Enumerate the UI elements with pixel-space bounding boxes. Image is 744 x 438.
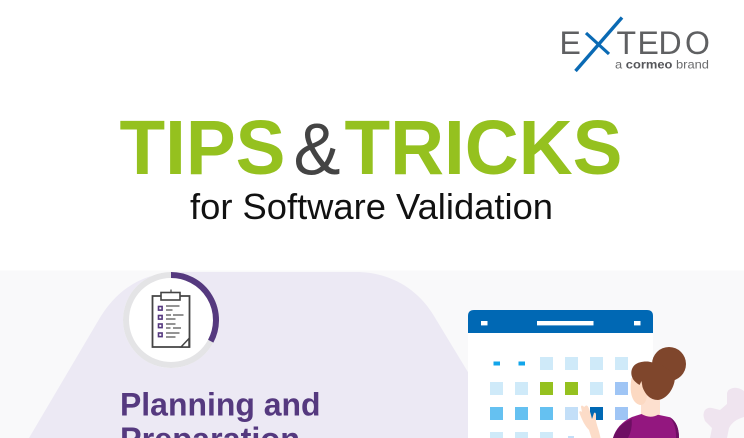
- hair: [631, 361, 675, 400]
- logo: EXTEDO: E: [560, 25, 581, 61]
- calendar: [468, 310, 653, 438]
- body: [613, 414, 679, 438]
- logo: EXTEDO: O: [685, 25, 710, 61]
- calendar body: [468, 325, 653, 438]
- title: Tips and Tricks: [120, 105, 622, 191]
- title: Tips and Tricks: TRICKS: [344, 105, 622, 191]
- calendar header: [468, 310, 653, 333]
- heading: planning and preparation: Planning and: [120, 386, 320, 422]
- logo: EXTEDO: D: [658, 25, 682, 61]
- logo: EXTEDO: E: [638, 25, 659, 61]
- progress ring with clipboard icon: [123, 272, 219, 368]
- hand: [579, 405, 600, 438]
- icon: clipboard checklist: [152, 290, 190, 347]
- hair bun: [652, 347, 686, 381]
- panel: planning and preparation background: [29, 272, 500, 438]
- face: [631, 378, 647, 405]
- icon: gear: [704, 388, 744, 438]
- subtitle: for Software Validation: [190, 186, 553, 227]
- calendar cells: [490, 357, 628, 438]
- heading: planning and preparation: [120, 386, 320, 438]
- logo: EXTEDO: a cormeo brand: [615, 58, 709, 72]
- illustration: woman pointing at calendar: [579, 347, 686, 438]
- title: Tips and Tricks: &: [294, 110, 340, 190]
- logo: EXTEDO: T: [616, 25, 636, 61]
- neck: [641, 395, 660, 418]
- logo: EXTEDO: [560, 18, 710, 72]
- title: Tips and Tricks: TIPS: [120, 105, 286, 191]
- lower section background: [0, 270, 744, 438]
